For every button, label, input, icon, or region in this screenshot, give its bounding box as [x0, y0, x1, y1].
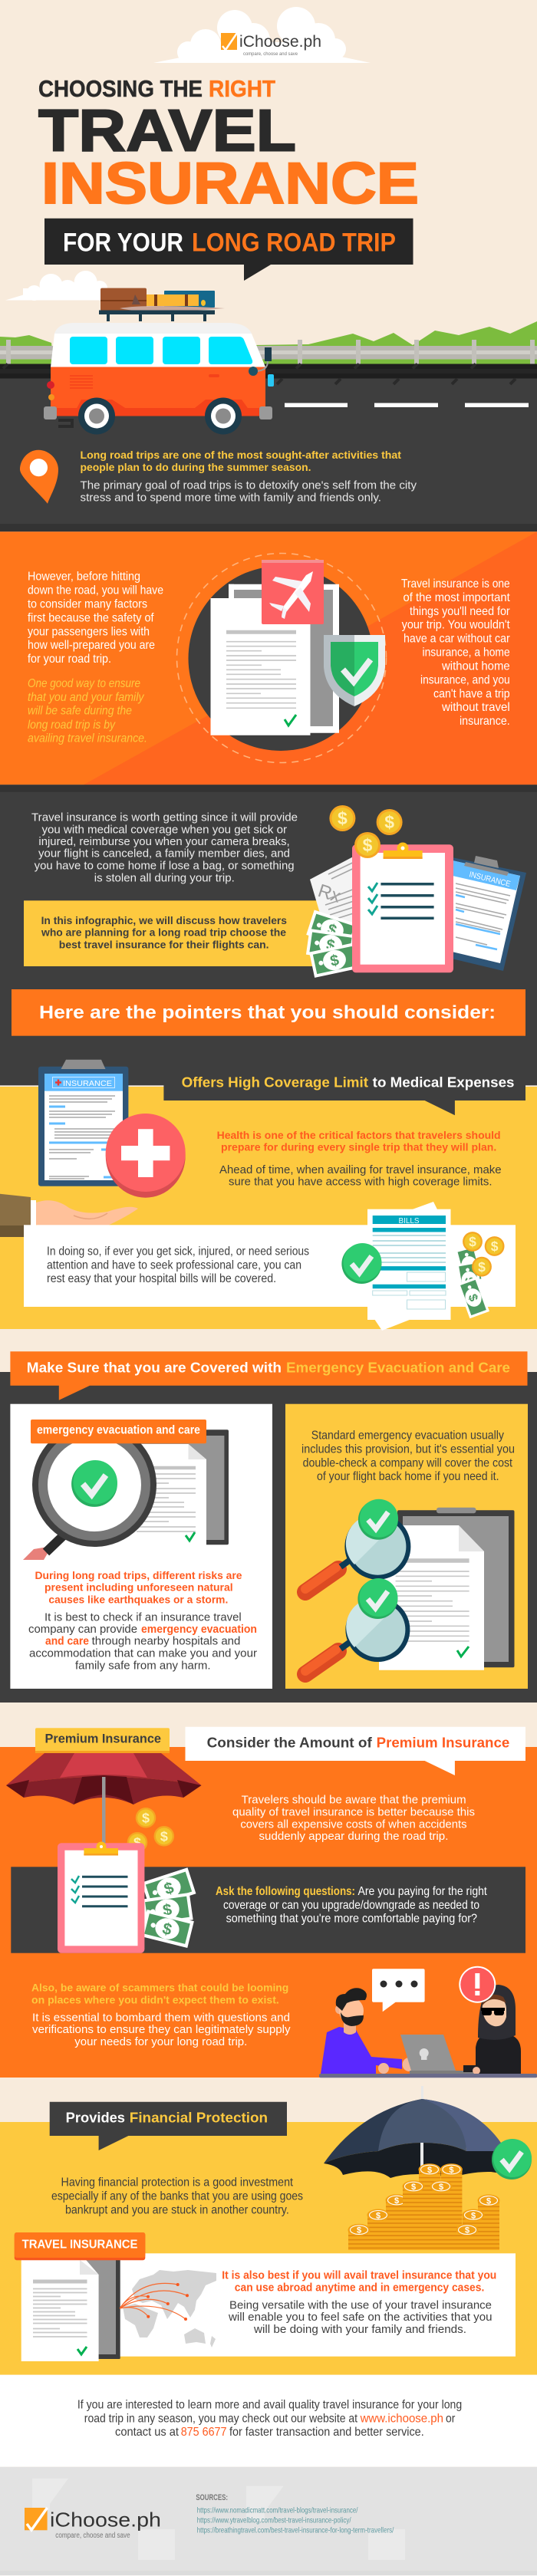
icon: policy document — [21, 2255, 120, 2361]
wheels — [78, 397, 242, 434]
body text: company can provide — [28, 1624, 137, 1636]
closing call to action: www.ichoose.ph — [360, 2412, 443, 2425]
heading bubble: Make Sure that you are Covered with — [27, 1360, 282, 1375]
icon: red umbrella — [6, 1753, 201, 1846]
icon: coins — [329, 805, 403, 858]
icon: cloud — [153, 7, 371, 63]
van windows — [70, 337, 252, 364]
logo mark — [221, 33, 237, 50]
heading bubble: Offers High Coverage Limit — [182, 1075, 368, 1091]
road scene — [0, 271, 537, 531]
heading bubble — [50, 2102, 287, 2150]
body text: injured, reimburse you when your camera breaks, — [38, 836, 290, 848]
body text: will be doing with your family and friends. — [253, 2324, 466, 2336]
sources heading: SOURCES: — [196, 2493, 228, 2502]
heading bubble: Emergency Evacuation and Care — [286, 1360, 510, 1375]
label: premium insurance — [35, 1728, 170, 1753]
red highlight text: can use abroad anytime and in emergency cases. — [235, 2282, 484, 2294]
intro highlight text: people plan to do during the summer season. — [80, 461, 311, 473]
right text: can't have a trip — [433, 687, 510, 700]
icon: plane card — [262, 560, 324, 624]
right text: without travel — [441, 701, 510, 714]
body text: your flight is canceled, a family member dies, and — [38, 848, 290, 860]
body text: accommodation that can make you and your — [29, 1647, 257, 1660]
right text: insurance, and you — [420, 673, 510, 686]
right text: insurance, a home — [422, 646, 510, 660]
closing call to action: If you are interested to learn more and avail quality travel insurance for your long — [77, 2399, 462, 2412]
illustration: document with two magnifiers — [305, 1499, 514, 1674]
right text: things you'll need for — [410, 605, 510, 618]
heading bubble — [163, 1066, 525, 1115]
red highlight text — [35, 1569, 242, 1606]
logo mark — [25, 2508, 48, 2530]
illustration: policy, plane and shield — [176, 554, 387, 762]
yellow callout — [24, 900, 323, 966]
question text: Ask the following questions: — [216, 1885, 355, 1898]
question text: something that you're more comfortable paying for? — [226, 1913, 477, 1926]
heading bubble: Premium Insurance — [377, 1735, 509, 1750]
left text: your passengers lies with — [28, 625, 150, 638]
illustration: documents and coins — [306, 805, 526, 978]
body text — [31, 812, 298, 885]
left text: first because the safety of — [28, 611, 154, 624]
header: logo on cloud — [153, 7, 371, 63]
dark question panel — [11, 1842, 525, 1953]
right text: insurance. — [460, 715, 510, 728]
red highlight text: It is also best if you will avail travel insurance that you — [222, 2270, 496, 2282]
heading bubble: Provides — [66, 2110, 125, 2125]
body text: Standard emergency evacuation usually — [311, 1429, 504, 1443]
panel: right yellow — [285, 1404, 528, 1689]
red highlight text — [217, 1129, 501, 1153]
body text: of your flight back home if you need it. — [317, 1470, 499, 1483]
title — [38, 75, 419, 281]
heading bubble: Consider the Amount of — [207, 1735, 373, 1750]
body text: covers all expensive costs of when accidents — [240, 1818, 466, 1831]
body text: you with medical coverage when you get sick or — [41, 824, 287, 836]
body text: especially if any of the banks that you are using goes — [51, 2190, 303, 2203]
left italic highlight: One good way to ensure — [28, 677, 140, 690]
icon: bills and cash — [341, 1202, 505, 1331]
body text — [228, 2299, 493, 2336]
title line: insurance: INSURANCE — [41, 151, 419, 216]
heading bubble — [186, 1727, 525, 1775]
panel: why get insurance — [0, 785, 537, 1085]
closing call to action: or — [446, 2412, 456, 2425]
icon: cash — [140, 1867, 196, 1948]
yellow callout: best travel insurance for their flights can. — [59, 938, 269, 950]
question text — [216, 1885, 487, 1926]
icon: prescription paper: Rx — [315, 880, 343, 907]
scammer body text: It is essential to bombard them with questions and — [32, 2012, 290, 2024]
closing call to action: contact us at — [115, 2426, 180, 2439]
bumpers — [44, 406, 272, 419]
right text: your trip. You wouldn't — [402, 619, 510, 632]
red highlight text: present including unforeseen natural — [44, 1581, 233, 1594]
body text: you have to come home if lose a bag, or something — [35, 860, 295, 873]
closing call to action: road trip in any season, you may check out our website at — [84, 2412, 357, 2425]
sources list: https://www.ytravelblog.com/best-travel-insurance-policy/ — [197, 2516, 351, 2525]
sources list: https://breathingtravel.com/best-travel-insurance-for-long-term-travellers/ — [197, 2526, 394, 2535]
scammer highlight text — [31, 1982, 288, 2005]
intro body text: The primary goal of road trips is to detoxify one's self from the city — [80, 480, 417, 492]
scammer body text: verifications to ensure they can legitimately supply — [32, 2024, 291, 2036]
body text: Travel insurance is worth getting since it will provide — [31, 812, 298, 824]
panel: orange intro — [0, 531, 537, 785]
right text: without home — [441, 660, 510, 673]
heading bubble: to Medical Expenses — [373, 1075, 514, 1091]
body text: through nearby hospitals and — [92, 1636, 240, 1648]
body text: emergency evacuation — [141, 1624, 257, 1636]
red highlight text: prepare for during every single trip that they will plan. — [221, 1141, 496, 1153]
right text: Travel insurance is one — [401, 577, 510, 591]
sources list — [197, 2506, 394, 2535]
white panel — [24, 1225, 516, 1307]
scammer highlight text: on places where you didn't expect them to exist. — [31, 1993, 279, 2005]
body text — [301, 1429, 515, 1483]
footer — [0, 2467, 537, 2576]
roof luggage — [99, 288, 225, 321]
red highlight text: Health is one of the critical factors that travelers should — [217, 1129, 501, 1141]
heading bubble — [10, 1351, 527, 1400]
icon: checklist clipboard — [352, 842, 453, 972]
panel: left white — [10, 1404, 272, 1689]
body text: Ahead of time, when availing for travel insurance, make — [219, 1164, 502, 1176]
body text: is stolen all during your trip. — [94, 873, 235, 885]
closing call to action: for faster transaction and better service. — [229, 2426, 424, 2439]
question text: coverage or can you upgrade/downgrade as needed to — [223, 1899, 479, 1912]
illustration: traveler and scammer — [319, 1966, 537, 2078]
intro highlight text — [80, 449, 401, 473]
left text — [28, 571, 163, 666]
heading bubble: Financial Protection — [130, 2110, 268, 2125]
scammer highlight text: Also, be aware of scammers that could be looming — [31, 1982, 288, 1994]
icon: coins — [127, 1808, 174, 1853]
label: emergency evacuation: emergency evacuation and care — [37, 1423, 200, 1436]
icon: open hand — [0, 1194, 138, 1237]
label: travel insurance — [15, 2232, 145, 2260]
sources list: https://www.nomadicmatt.com/travel-blogs/travel-insurance/ — [197, 2506, 358, 2515]
banner: pointers — [12, 989, 525, 1036]
white panel: In doing so, if ever you get sick, injured, or need serious — [47, 1245, 309, 1258]
question text: Are you paying for the right — [357, 1885, 487, 1898]
body text: includes this provision, but it's essential you — [301, 1443, 515, 1456]
icon: medical cross — [106, 1114, 186, 1198]
icon: route map — [120, 2270, 216, 2347]
section 2: emergency evacuation — [0, 1351, 537, 1703]
icon: navy umbrella — [324, 2086, 510, 2178]
icon: checklist clipboard — [58, 1842, 144, 1953]
illustration: document and magnifier — [23, 1423, 229, 1560]
intro body text — [80, 480, 417, 505]
closing call to action: 875 6677 — [181, 2426, 227, 2439]
red highlight text — [222, 2270, 496, 2294]
body text: family safe from any harm. — [75, 1660, 210, 1672]
white panel: attention and have to seek professional care, you can — [47, 1258, 301, 1272]
left italic highlight: long road trip is by — [28, 719, 116, 732]
icon: location pin — [20, 450, 58, 504]
speech bubble — [372, 1969, 425, 2012]
icon: coin stacks — [348, 2163, 500, 2250]
scammer body text — [32, 2012, 291, 2048]
body text: Having financial protection is a good investment — [61, 2176, 293, 2189]
title line: choosing the right: RIGHT — [209, 75, 275, 102]
icon: magnifier bottom — [305, 1578, 410, 1674]
mirror and headlight — [249, 347, 274, 387]
yellow callout: who are planning for a long road trip choose the — [41, 926, 286, 939]
right text: have a car without car — [404, 633, 510, 646]
traveler — [321, 1988, 416, 2074]
icon: cash — [306, 910, 360, 978]
body text: and care — [45, 1636, 89, 1648]
icon: magnifier top — [305, 1499, 410, 1592]
yellow callout: In this infographic, we will discuss how travelers — [41, 914, 287, 926]
scammer — [463, 1985, 521, 2074]
laptop — [400, 2035, 479, 2074]
alert icon — [459, 1966, 496, 2003]
white panel — [24, 2253, 516, 2357]
body text: bankrupt and you are stuck in another country. — [65, 2203, 289, 2216]
hills — [0, 321, 537, 364]
left italic highlight: will be safe during the — [28, 705, 132, 718]
body text: suddenly appear during the road trip. — [259, 1831, 448, 1843]
section 4: financial protection — [0, 2086, 537, 2375]
icon: van with luggage — [44, 288, 274, 434]
body text — [232, 1795, 475, 1843]
logo wordmark: iChoose.ph — [239, 33, 321, 51]
body text: It is best to check if an insurance travel — [44, 1611, 242, 1624]
body text: Being versatile with the use of your travel insurance — [229, 2299, 492, 2311]
label: emergency evacuation — [31, 1420, 206, 1443]
intro block on road — [20, 449, 417, 505]
section 1: high coverage limit — [0, 1060, 537, 1331]
body text — [28, 1611, 257, 1672]
left italic highlight: that you and your family — [28, 691, 144, 704]
red highlight text: causes like earthquakes or a storm. — [48, 1594, 228, 1606]
icon: insurance clipboard: INSURANCE — [468, 870, 512, 889]
left italic highlight — [28, 677, 147, 745]
speech banner: for your long road trip: LONG ROAD TRIP — [192, 229, 396, 258]
label: travel insurance: TRAVEL INSURANCE — [22, 2239, 138, 2252]
right text: of the most important — [404, 591, 510, 604]
logo tagline: compare, choose and save — [55, 2532, 130, 2540]
body text: Travelers should be aware that the premium — [242, 1795, 466, 1807]
guard rail — [0, 340, 537, 364]
icon: bills and cash: BILLS — [399, 1217, 420, 1225]
banner: pointers: Here are the pointers that you should consider: — [39, 1002, 496, 1023]
body text — [219, 1164, 502, 1189]
icon: insurance clipboard — [407, 853, 526, 971]
left text: to consider many factors — [28, 598, 147, 610]
body text: sure that you have access with high coverage limits. — [229, 1176, 493, 1189]
icon: insurance clipboard with cross — [38, 1060, 128, 1186]
icon: green check — [492, 2139, 532, 2180]
icon: insurance clipboard with cross: INSURANCE — [63, 1080, 112, 1088]
road dashes — [285, 403, 529, 407]
left text: down the road, you will have — [28, 584, 163, 597]
right text — [401, 577, 510, 728]
closing call to action — [0, 2375, 537, 2467]
icon: small cloud — [5, 271, 111, 301]
icon: prescription paper — [310, 853, 361, 934]
speech banner: for your long road trip: FOR YOUR — [63, 229, 183, 258]
scammer body text: your needs for your long road trip. — [74, 2036, 247, 2048]
title line: choosing the right: CHOOSING THE — [38, 75, 203, 102]
speech banner: for your long road trip — [44, 219, 413, 281]
logo tagline: compare, choose and save — [243, 52, 298, 57]
icon: shield — [324, 635, 385, 706]
label: premium insurance: Premium Insurance — [44, 1732, 161, 1746]
red highlight text: During long road trips, different risks are — [35, 1569, 242, 1581]
title line: travel: TRAVEL — [38, 98, 296, 164]
intro body text: stress and to spend more time with family and friends only. — [80, 492, 381, 505]
left text: However, before hitting — [28, 571, 140, 584]
section 3: premium insurance — [0, 1727, 537, 2078]
table — [319, 2074, 537, 2078]
white panel: rest easy that your hospital bills will be covered. — [47, 1272, 276, 1285]
logo wordmark: iChoose.ph — [50, 2508, 161, 2531]
road surface — [0, 364, 537, 531]
body text — [51, 2176, 303, 2216]
intro highlight text: Long road trips are one of the most sought-after activities that — [80, 449, 401, 461]
body text: quality of travel insurance is better because this — [232, 1806, 475, 1818]
body text: will enable you to feel safe on the activities that you — [228, 2311, 493, 2324]
body text: double-check a company will cover the cost — [303, 1456, 512, 1469]
left text: for your road trip. — [28, 653, 111, 666]
left text: how well-prepared you are — [28, 639, 155, 652]
left italic highlight: availing travel insurance. — [28, 732, 147, 745]
